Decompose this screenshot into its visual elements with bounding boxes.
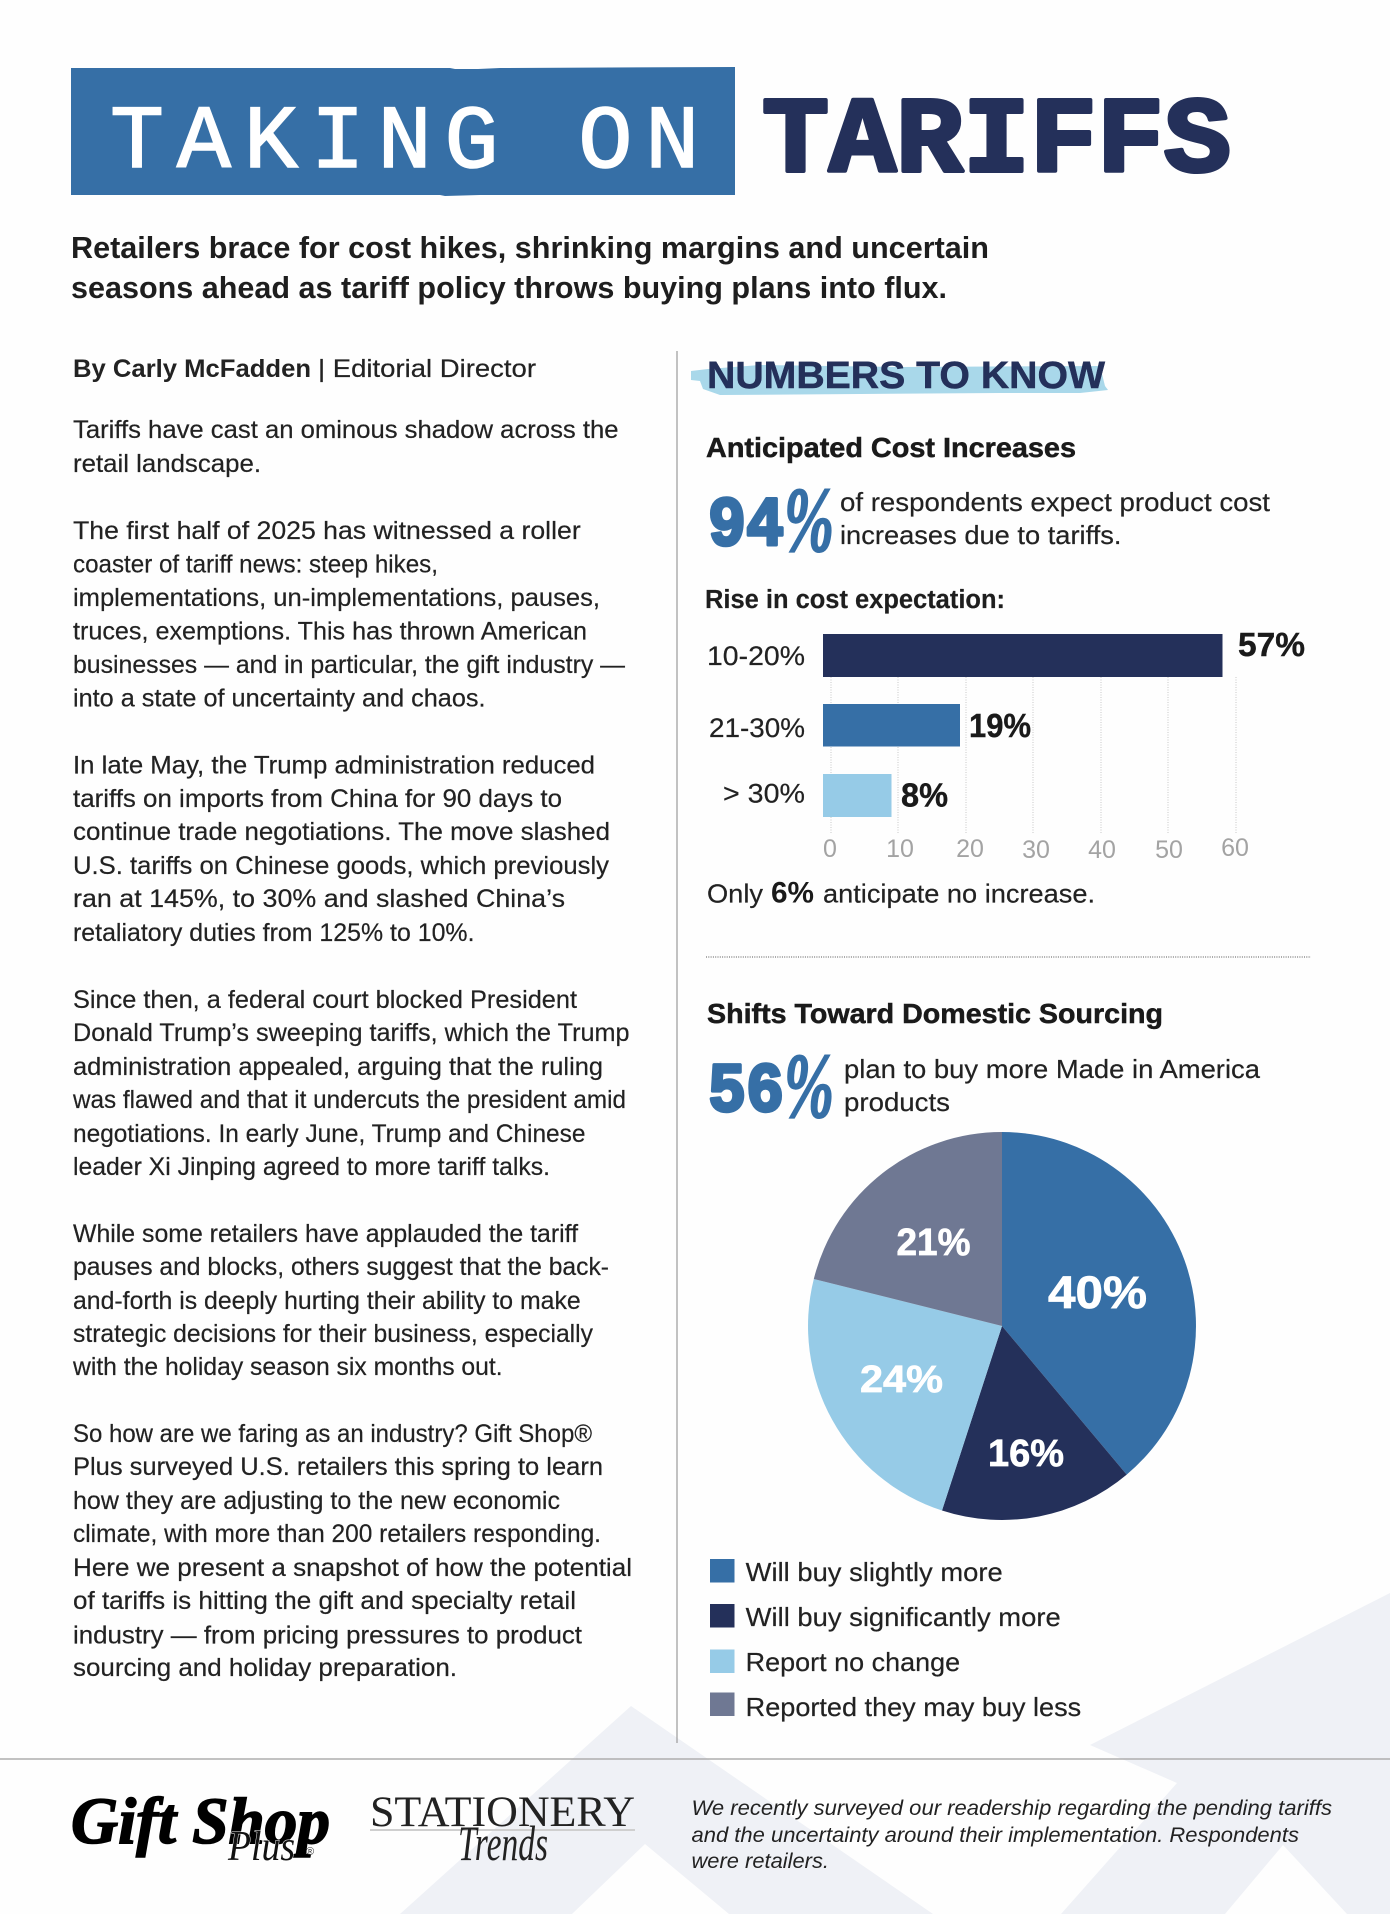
article paragraph 1: retail landscape.	[73, 450, 261, 478]
stat: 94 percent: %	[784, 469, 834, 571]
pie labels	[860, 1222, 1147, 1475]
article paragraph 6: So how are we faring as an industry? Gift Shop®	[73, 1420, 593, 1448]
article paragraph 6: how they are adjusting to the new economic	[73, 1487, 560, 1515]
stat: 56 percent: %	[784, 1035, 834, 1137]
article paragraph 2: into a state of uncertainty and chaos.	[73, 684, 486, 712]
article paragraph 1	[73, 416, 618, 478]
heading: numbers to know: NUMBERS TO KNOW	[707, 355, 1105, 397]
bar: 10-20%	[707, 626, 1305, 677]
article paragraph 4	[72, 986, 630, 1181]
article paragraph 3: tariffs on imports from China for 90 days to	[73, 785, 562, 813]
brush stroke highlight	[691, 365, 1108, 395]
subtitle: Retailers brace for cost hikes, shrinking margins and uncertain	[71, 230, 989, 265]
x axis labels: 0	[823, 835, 837, 863]
pie labels: 16%	[988, 1433, 1064, 1475]
article paragraph 4: Donald Trump’s sweeping tariffs, which the Trump	[73, 1019, 630, 1047]
bar: 10-20%: 57%	[1238, 626, 1305, 663]
bar chart	[707, 626, 1305, 864]
x axis labels: 30	[1022, 836, 1050, 864]
legend: Report no change	[746, 1647, 960, 1677]
article paragraph 5: and-forth is deeply hurting their ability to make	[73, 1287, 581, 1315]
heading: shifts toward domestic sourcing: Shifts Toward Domestic Sourcing	[707, 998, 1163, 1029]
article paragraph 6	[73, 1420, 632, 1682]
article paragraph 2: coaster of tariff news: steep hikes,	[73, 550, 438, 578]
pie labels: 40%	[1048, 1267, 1147, 1318]
article paragraph 4: leader Xi Jinping agreed to more tariff talks.	[73, 1153, 550, 1181]
article paragraph 6: of tariffs is hitting the gift and specialty retail	[73, 1587, 576, 1615]
logo: stationery trends: STATIONERY	[370, 1789, 635, 1836]
article paragraph 4: administration appealed, arguing that the ruling	[73, 1053, 603, 1081]
survey note: and the uncertainty around their implementation. Respondents	[692, 1823, 1299, 1847]
article paragraph 3: In late May, the Trump administration reduced	[73, 752, 595, 780]
article paragraph 2: implementations, un-implementations, pauses,	[73, 584, 600, 612]
legend: Reported they may buy less	[746, 1692, 1081, 1722]
article paragraph 5: strategic decisions for their business, especially	[73, 1320, 593, 1348]
article paragraph 3: ran at 145%, to 30% and slashed China’s	[73, 885, 565, 913]
bar: 21-30%: 21-30%	[709, 713, 805, 743]
stat: 56 percent: 56	[708, 1054, 784, 1133]
article paragraph 3: continue trade negotiations. The move slashed	[73, 818, 610, 846]
article paragraph 4: negotiations. In early June, Trump and Chinese	[73, 1120, 586, 1148]
stat: 94 percent: increases due to tariffs.	[840, 520, 1122, 550]
stat: 94 percent: 94	[708, 488, 784, 567]
article paragraph 2: businesses — and in particular, the gift industry —	[73, 651, 625, 679]
survey note	[692, 1796, 1332, 1873]
title	[71, 67, 1231, 204]
pie labels: 21%	[896, 1222, 970, 1264]
bar: 21-30%: 19%	[969, 707, 1031, 744]
logo: gift shop plus: Gift Shop	[71, 1785, 330, 1858]
article paragraph 5	[72, 1220, 609, 1381]
slice: will buy slightly more 40%	[1002, 1132, 1196, 1475]
byline	[73, 355, 536, 383]
title text: taking on: TAKING ON	[110, 93, 712, 195]
slice: will buy significantly more 16%	[942, 1326, 1127, 1520]
stat: 56 percent: plan to buy more Made in America	[844, 1054, 1261, 1084]
bar: 21-30%	[709, 704, 1031, 746]
article paragraph 5: pauses and blocks, others suggest that the back-	[73, 1253, 609, 1281]
heading: anticipated cost increases: Anticipated Cost Increases	[706, 432, 1076, 463]
article paragraph 3: retaliatory duties from 125% to 10%.	[73, 919, 474, 947]
logo: stationery trends	[370, 1789, 635, 1871]
article paragraph 5: with the holiday season six months out.	[72, 1353, 503, 1381]
background chevron shapes	[400, 1593, 1390, 1914]
pie labels: 24%	[860, 1359, 943, 1401]
logo: gift shop plus: Plus	[227, 1824, 295, 1870]
x axis labels: 10	[886, 835, 914, 863]
x axis labels: 50	[1155, 836, 1183, 864]
stat: 94 percent	[708, 469, 1271, 571]
survey note: were retailers.	[692, 1849, 829, 1873]
article paragraph 6: Plus surveyed U.S. retailers this spring to learn	[73, 1453, 603, 1481]
slice: may buy less 21%	[814, 1132, 1002, 1326]
bar: 10-20%: 10-20%	[707, 641, 805, 671]
logo: stationery trends: Trends	[458, 1815, 548, 1871]
article paragraph 4: Since then, a federal court blocked President	[73, 986, 577, 1014]
article paragraph 2	[73, 517, 625, 712]
bar: over 30%: > 30%	[723, 778, 805, 808]
stat: 56 percent	[708, 1035, 1261, 1137]
article paragraph 3: U.S. tariffs on Chinese goods, which previously	[73, 852, 610, 880]
note: only 6 percent: 6%	[771, 876, 814, 910]
logo: gift shop plus: ®	[306, 1846, 314, 1858]
stat: 94 percent: of respondents expect product cost	[840, 487, 1271, 517]
slice: report no change 24%	[808, 1279, 1002, 1510]
article paragraph 6: sourcing and holiday preparation.	[73, 1654, 457, 1682]
legend	[710, 1557, 1081, 1722]
article paragraph 5: While some retailers have applauded the tariff	[73, 1220, 578, 1248]
subheading: rise in cost expectation: Rise in cost expectation:	[705, 586, 1005, 614]
article paragraph 2: The first half of 2025 has witnessed a roller	[73, 517, 581, 545]
title banner	[71, 67, 735, 196]
x axis labels: 20	[956, 835, 984, 863]
x axis labels: 60	[1221, 834, 1249, 862]
article paragraph 1: Tariffs have cast an ominous shadow across the	[73, 416, 618, 444]
subtitle: seasons ahead as tariff policy throws buying plans into flux.	[71, 270, 947, 305]
title text: tariffs: TARIFFS	[762, 82, 1231, 204]
subtitle	[71, 230, 989, 305]
legend: Will buy significantly more	[746, 1602, 1061, 1632]
article paragraph 4: was flawed and that it undercuts the president amid	[72, 1086, 626, 1114]
article paragraph 2: truces, exemptions. This has thrown American	[73, 618, 587, 646]
bar: over 30%: 8%	[901, 776, 948, 814]
x axis labels	[823, 834, 1249, 864]
legend: Will buy slightly more	[746, 1557, 1003, 1587]
note: only 6 percent: anticipate no increase.	[823, 878, 1095, 908]
x axis labels: 40	[1088, 836, 1116, 864]
pie chart	[808, 1132, 1196, 1520]
article paragraph 6: climate, with more than 200 retailers responding.	[73, 1520, 601, 1548]
byline: | Editorial Director	[318, 355, 536, 383]
stat: 56 percent: products	[844, 1087, 950, 1117]
article paragraph 6: industry — from pricing pressures to product	[73, 1622, 582, 1650]
note: only 6 percent	[707, 876, 1095, 910]
survey note: We recently surveyed our readership regarding the pending tariffs	[692, 1796, 1332, 1820]
bar: over 30%	[723, 774, 948, 817]
note: only 6 percent: Only	[707, 878, 763, 908]
byline: By Carly McFadden	[73, 355, 311, 383]
article paragraph 3	[73, 752, 610, 947]
article paragraph 6: Here we present a snapshot of how the potential	[73, 1554, 632, 1582]
